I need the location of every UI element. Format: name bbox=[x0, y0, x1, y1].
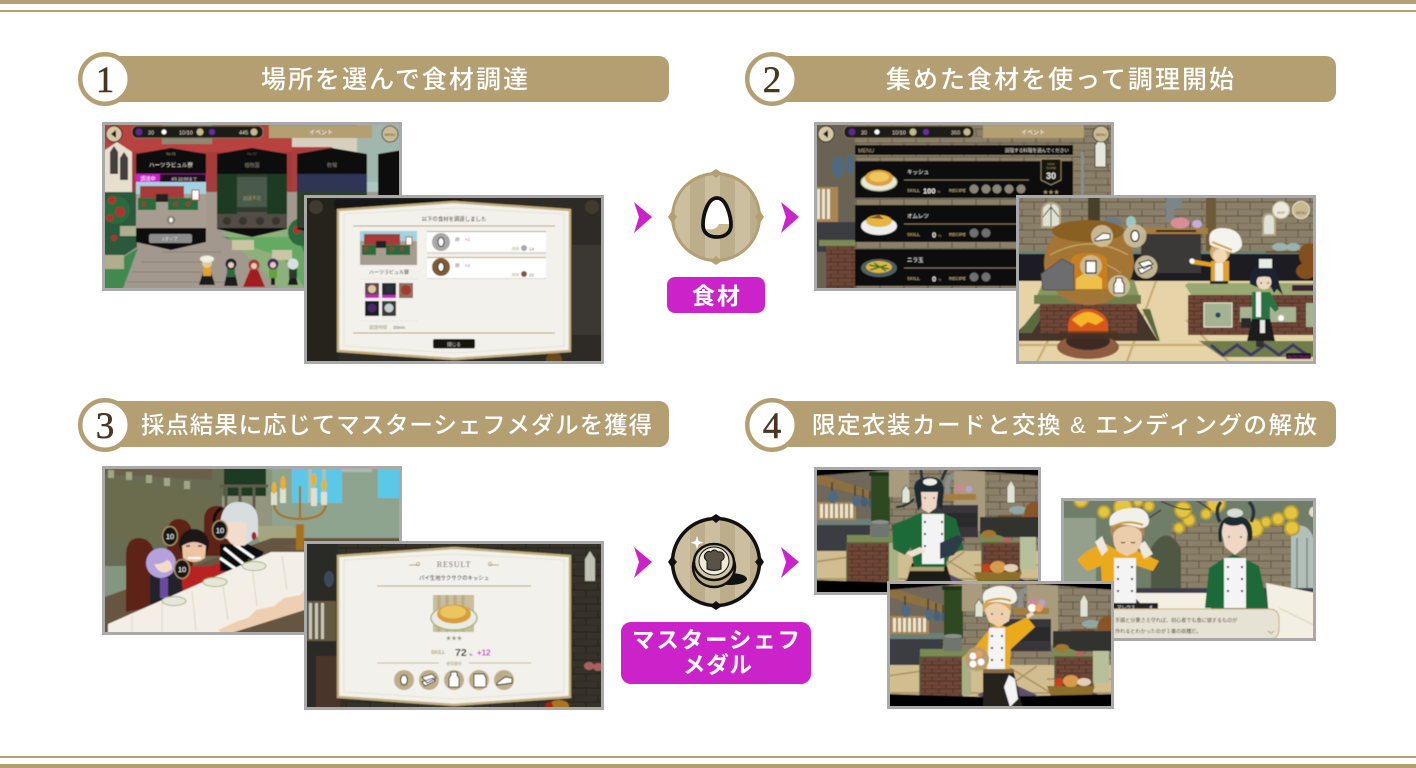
menu header: MENU bbox=[858, 148, 874, 154]
windows bbox=[1042, 203, 1275, 235]
dish row: omelette: オムレツ bbox=[907, 213, 929, 220]
bottom double border bbox=[0, 756, 1416, 768]
shelf with pots bbox=[1103, 195, 1208, 234]
screenshot: oven cooking scene bbox=[1016, 195, 1316, 364]
candelabra bbox=[271, 473, 327, 550]
step 2 heading: 2 bbox=[763, 60, 781, 101]
arrow right after egg medallion bbox=[781, 202, 799, 233]
close button bbox=[433, 339, 475, 348]
menu button bbox=[1292, 202, 1310, 218]
ingredient row 2: 22 bbox=[529, 272, 535, 278]
arrow right before egg medallion bbox=[634, 202, 652, 233]
skip button: SKIP bbox=[1277, 211, 1286, 215]
label: master chef medal: マスターシェフ bbox=[632, 628, 800, 653]
green uniform character bbox=[1241, 259, 1284, 347]
step 1 heading: 場所を選んで食材調達 bbox=[261, 66, 528, 94]
menu header: 調理する料理を選んでください bbox=[1005, 147, 1069, 154]
menu button: MENU bbox=[385, 133, 396, 137]
top status bar: 10/10 bbox=[892, 130, 906, 136]
dish row: quiche bbox=[855, 159, 1073, 198]
step 3 heading: 採点結果に応じてマスターシェフメダルを獲得 bbox=[141, 412, 652, 438]
top status bar: 445 bbox=[239, 130, 248, 136]
dish title: パイ生地サクサクのキッシュ bbox=[419, 574, 489, 582]
location card 1: 調達中 bbox=[140, 176, 156, 182]
skill score bbox=[431, 647, 491, 659]
label: master chef medal: メダル bbox=[683, 652, 752, 678]
score paddles bbox=[162, 520, 228, 578]
menu button bbox=[1093, 126, 1109, 142]
score paddles: 10 bbox=[178, 565, 186, 574]
dish row: quiche: キッシュ bbox=[907, 170, 929, 176]
screenshot: gathered ingredients dialog: 調達時間 bbox=[369, 324, 387, 331]
dish row: quiche: HIGH bbox=[1048, 162, 1054, 166]
dish row: omelette: 0 bbox=[932, 230, 936, 240]
top status bar: 30 bbox=[148, 130, 154, 136]
event banner bbox=[269, 125, 372, 138]
chef character bbox=[1189, 228, 1242, 284]
floating ingredient icons bbox=[1080, 224, 1158, 297]
icon: master chef medal medallion bbox=[668, 514, 764, 610]
brick oven bbox=[1018, 220, 1160, 359]
orange uniform character bbox=[1077, 508, 1159, 608]
location card 4 partial bbox=[378, 150, 402, 229]
dish row: quiche: % bbox=[937, 190, 941, 194]
arrow right after medal medallion bbox=[781, 547, 799, 578]
step 4 heading bbox=[747, 400, 1336, 450]
icon: egg ingredient medallion bbox=[668, 169, 764, 265]
dish row: nira egg: 0 bbox=[932, 274, 936, 284]
score paddles: 10 bbox=[216, 526, 224, 535]
event banner: イベント bbox=[309, 130, 333, 136]
chibi characters bbox=[199, 256, 298, 287]
judge: white hair in stripes bbox=[214, 502, 264, 572]
step 1 heading bbox=[80, 54, 669, 104]
event banner bbox=[983, 125, 1084, 138]
serving counter bbox=[1185, 283, 1316, 335]
top status bar: 10/10 bbox=[179, 130, 193, 136]
judge: purple hair bbox=[146, 548, 190, 610]
dish row: quiche: SKILL bbox=[907, 188, 920, 193]
step 2 heading: 集めた食材を使って調理開始 bbox=[886, 66, 1234, 94]
dialogue box: 手順と分量さえ守れば、初心者でも食に値するものが bbox=[1115, 617, 1237, 624]
location card 1 bbox=[136, 148, 206, 250]
dialogue box bbox=[1061, 609, 1279, 639]
ingredient row 2: ×2 bbox=[465, 263, 471, 268]
top status bar bbox=[844, 126, 974, 138]
menu button: MENU bbox=[1096, 133, 1107, 137]
judge: dark hair in red bbox=[179, 529, 234, 601]
floor rug bbox=[1199, 341, 1316, 357]
step 3 heading bbox=[80, 400, 669, 450]
location card 3 bbox=[297, 148, 367, 237]
speaker name tag bbox=[1061, 603, 1158, 611]
dish row: quiche: ★★★ bbox=[1043, 190, 1060, 196]
label: master chef medal bbox=[621, 622, 811, 684]
used ingredients bbox=[377, 661, 531, 690]
auto play tag: AUTO PLAY bbox=[1287, 354, 1310, 359]
step 3 heading: 3 bbox=[96, 406, 114, 447]
location card 2 bbox=[217, 148, 287, 237]
result heading: RESULT bbox=[437, 560, 471, 569]
green uniform character bbox=[1205, 502, 1268, 608]
location card 1: 4/6 22:00まで bbox=[171, 176, 197, 182]
quiche image bbox=[431, 595, 477, 632]
card: orange uniform character in kitchen bbox=[887, 581, 1114, 709]
step 4 heading: 4 bbox=[763, 406, 781, 447]
top status bar: 360 bbox=[951, 130, 960, 136]
screenshot: gathered ingredients dialog: ハーツラビュル寮 bbox=[369, 269, 409, 276]
menu button: MENU bbox=[1296, 211, 1307, 215]
dish row: omelette bbox=[855, 205, 1023, 242]
screenshot: result card bbox=[304, 541, 604, 710]
location card 2: 植物園 bbox=[244, 162, 260, 169]
ingredient row 2: 所持 bbox=[512, 272, 520, 277]
dish row: omelette: % bbox=[938, 234, 942, 238]
screenshot: judges at table bbox=[102, 466, 402, 635]
used ingredients: 使用食材 bbox=[446, 661, 462, 666]
skill score: +12 bbox=[477, 648, 491, 658]
screenshot: result card: ★★★ bbox=[446, 636, 463, 642]
ingredient row 2 bbox=[427, 257, 546, 279]
dish row: nira egg: RECIPE bbox=[949, 276, 966, 281]
dialog title: 以下の食材を調達しました bbox=[422, 215, 486, 223]
label: ingredients bbox=[667, 277, 765, 313]
card: dialogue scene bbox=[1061, 498, 1316, 641]
skip button bbox=[1272, 202, 1290, 218]
dish row: nira egg: SKILL bbox=[907, 276, 920, 281]
close button: 閉じる bbox=[447, 342, 461, 348]
step 1 heading: 1 bbox=[96, 60, 114, 101]
ingredient row 1 bbox=[427, 231, 546, 254]
menu header bbox=[855, 145, 1073, 155]
dish row: omelette: RECIPE bbox=[949, 232, 966, 237]
back button bbox=[106, 126, 122, 142]
ingredient row 1: 所持 bbox=[512, 246, 520, 251]
label: ingredients: 食材 bbox=[692, 283, 740, 309]
skill score: SKILL bbox=[431, 650, 445, 656]
event banner: イベント bbox=[1021, 130, 1045, 136]
back button bbox=[818, 126, 834, 142]
skill score: 72 bbox=[455, 647, 467, 659]
ingredient row 1: 卵 bbox=[455, 236, 460, 243]
location card 2: 調達不可 bbox=[243, 195, 261, 202]
card: green uniform character in kitchen bbox=[814, 467, 1041, 595]
dish row: omelette: SKILL bbox=[907, 232, 920, 237]
step 4 heading: 限定衣装カードと交換 & エンディングの解放 bbox=[812, 411, 1317, 438]
result heading bbox=[409, 560, 499, 569]
banquet table bbox=[108, 552, 422, 635]
skill score: % bbox=[469, 652, 473, 657]
screenshot: gathered ingredients dialog bbox=[304, 195, 604, 364]
location thumbnail bbox=[360, 231, 417, 265]
top double border bbox=[0, 0, 1416, 12]
arrow right before medal medallion bbox=[634, 547, 652, 578]
location card 1: ハーツラビュル寮 bbox=[149, 161, 193, 169]
dish row: quiche: RECIPE bbox=[949, 188, 966, 193]
dialogue box: 作れるとわかったのが１番の収穫だ。 bbox=[1115, 628, 1201, 635]
menu button bbox=[382, 126, 398, 142]
location card 1: 1ダイア bbox=[162, 236, 178, 242]
location card 2: No.02 bbox=[247, 152, 257, 156]
screenshot: gathered ingredients dialog: 20min bbox=[393, 325, 406, 330]
ingredient row 1: 14 bbox=[529, 246, 535, 252]
cast portraits bbox=[365, 283, 413, 316]
ingredient row 1: ×1 bbox=[465, 237, 471, 242]
step 2 heading bbox=[747, 54, 1336, 104]
hanging lanterns bbox=[1074, 493, 1299, 537]
location card 3: 牧場 bbox=[327, 162, 337, 169]
screenshot: cooking menu bbox=[814, 122, 1114, 291]
top status bar: 30 bbox=[861, 130, 867, 136]
location card 1: No.01 bbox=[166, 152, 176, 156]
score paddles: 10 bbox=[166, 532, 174, 541]
dish row: quiche: 100 bbox=[923, 186, 936, 196]
top status bar bbox=[132, 126, 263, 138]
ingredient row 2: 卵 bbox=[455, 262, 460, 269]
screenshot: gathering location select bbox=[102, 122, 402, 291]
red chairs bbox=[126, 506, 231, 612]
dish row: quiche: 30 bbox=[1046, 171, 1056, 181]
speaker name tag: マレウス bbox=[1117, 604, 1136, 611]
dish row: nira egg: % bbox=[938, 278, 942, 282]
dish row: nira egg: ニラ玉 bbox=[907, 257, 924, 264]
dish row: nira egg bbox=[855, 249, 1023, 286]
dish row: quiche: SCORE bbox=[1046, 166, 1056, 170]
